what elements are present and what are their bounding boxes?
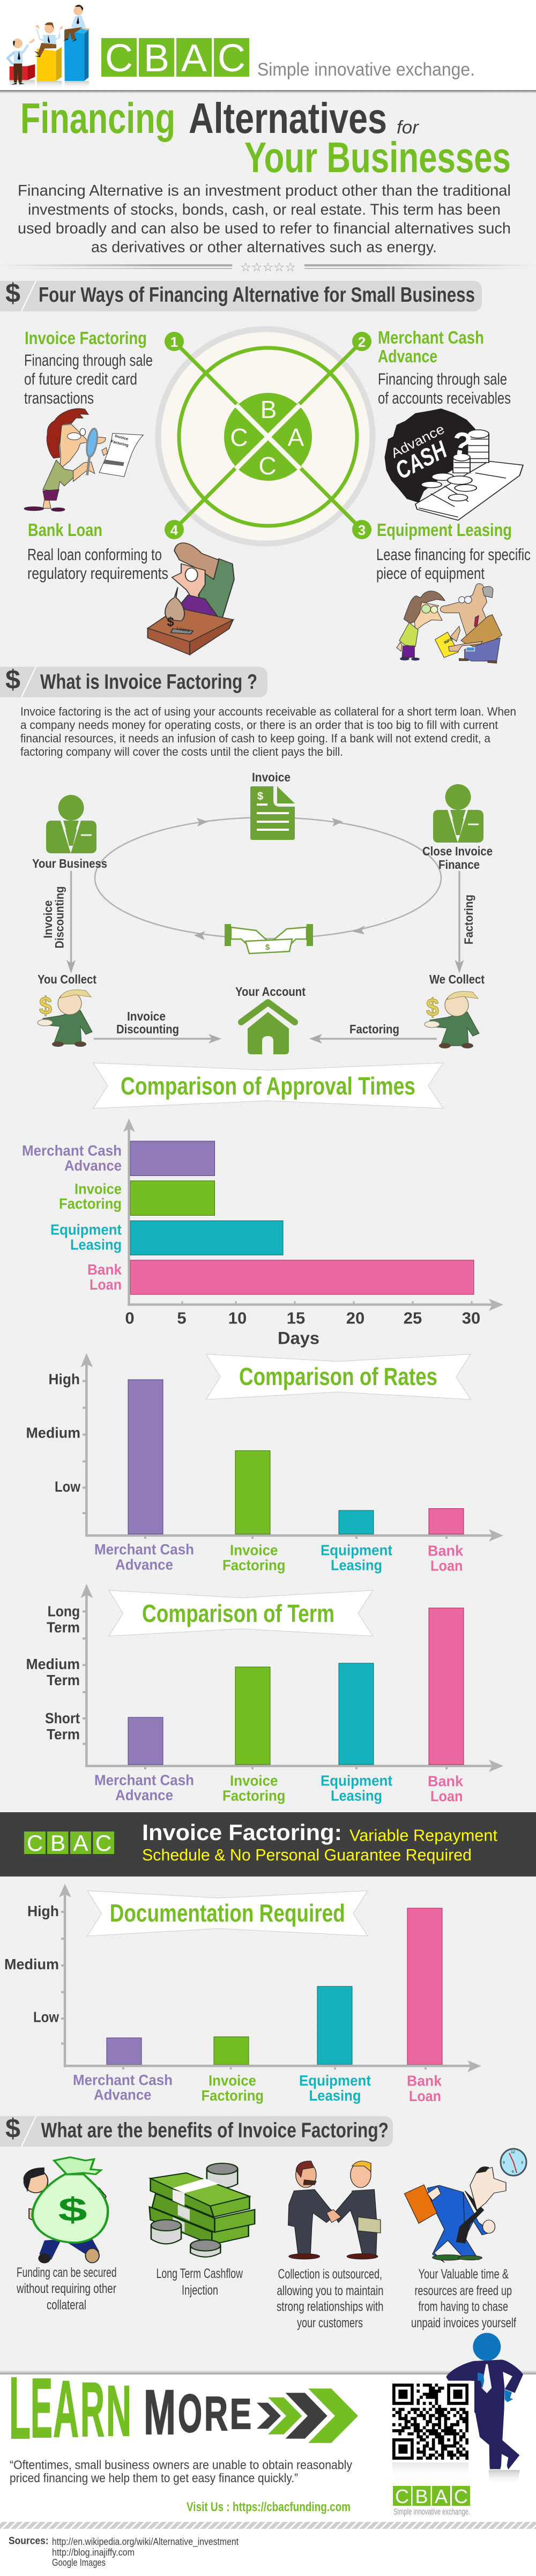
sources: Sources:: [9, 2535, 49, 2547]
label: your business: Your Business: [32, 857, 107, 870]
icon: house: [241, 1002, 295, 1054]
illustration: advance cash: Advance: [389, 421, 447, 461]
level labels: Low: [55, 1478, 80, 1495]
axes: [123, 1119, 503, 1311]
level labels: Short: [45, 1710, 80, 1726]
heading banner: approval times: [93, 1063, 443, 1108]
logo: CBAC: C: [218, 37, 245, 80]
section heading: what is invoice factoring: [0, 665, 267, 697]
icon: man holding dollar left: $: [39, 992, 52, 1019]
bar chart: term: [26, 1584, 503, 1805]
logo: CBAC small: B: [50, 1830, 65, 1856]
callout band: invoice factoring: Invoice Factoring:: [142, 1820, 342, 1845]
heading: learn more: N: [106, 2371, 131, 2451]
logo: CBAC: [101, 37, 249, 80]
diagram: CBAC wheel: 1: [170, 334, 178, 350]
label: invoice discounting horizontal: [116, 1009, 179, 1036]
sources: Google Images: [52, 2557, 106, 2568]
bars: [128, 1380, 464, 1534]
arrow: chevrons: [257, 2388, 358, 2443]
text: [277, 2267, 384, 2331]
intro paragraph: as derivatives or other alternatives such as energy.: [91, 239, 437, 256]
hatched divider: [0, 2522, 536, 2529]
label: invoice discounting horizontal: Invoice: [127, 1009, 166, 1023]
heading banner: approval times: Comparison of Approval Times: [121, 1072, 415, 1100]
heading: learn more: M: [144, 2377, 176, 2448]
text: allowing you to maintain: [277, 2283, 384, 2298]
category labels: Merchant Cash: [73, 2072, 173, 2088]
star divider: ☆☆☆☆☆: [240, 260, 296, 274]
diagram: CBAC wheel: 2: [358, 334, 366, 350]
label: invoice discounting horizontal: Discounting: [116, 1022, 179, 1036]
illustration: equipment leasing people: [397, 584, 502, 663]
tagline: Simple innovative exchange.: [257, 59, 475, 80]
illustration: advance cash: [385, 408, 523, 520]
axes: [80, 1584, 503, 1772]
invoice factoring paragraph: a company needs money for operating costs, or there is an order that is too big to fill with current: [20, 718, 498, 732]
category labels: Equipment: [50, 1221, 122, 1238]
callout band: invoice factoring: [0, 1812, 536, 1877]
day ticks: 15: [287, 1309, 305, 1327]
label: invoice discounting vertical: Discounting: [53, 887, 66, 949]
logo: CBAC footer: B: [415, 2485, 428, 2507]
title: [20, 94, 511, 181]
text: equipment leasing: [376, 520, 531, 583]
icon: close invoice finance person: [433, 784, 483, 843]
category labels: Factoring: [202, 2087, 264, 2104]
logo: CBAC: A: [181, 37, 207, 80]
category labels: Equipment: [321, 1542, 392, 1559]
logo: CBAC small: A: [73, 1830, 88, 1856]
text: your customers: [297, 2316, 363, 2331]
callout band: invoice factoring: Variable Repayment: [349, 1826, 497, 1845]
sources: http://blog.inajiffy.com: [52, 2547, 135, 2558]
heading: learn more: O: [178, 2384, 202, 2444]
text: Injection: [182, 2283, 218, 2298]
category labels: Factoring: [222, 1788, 285, 1804]
icon: clock: 3: [521, 2161, 523, 2165]
category labels: Bank: [407, 2073, 442, 2089]
callout band: invoice factoring: Schedule & No Personal Guarantee Required: [142, 1845, 472, 1864]
visit link: Visit Us : https://cbacfunding.com: [187, 2500, 351, 2514]
benefit: cashflow: [150, 2163, 255, 2298]
text: invoice factoring: transactions: [24, 389, 94, 407]
QR reflection: [392, 2462, 468, 2480]
axis title: Days: [278, 1328, 319, 1347]
heading: learn more: E: [31, 2361, 53, 2455]
illustration: advance cash: ?: [449, 425, 474, 463]
category labels: [73, 2072, 442, 2104]
category labels: Loan: [430, 1788, 463, 1805]
flow diagram: invoice factoring cycle: [32, 770, 493, 1054]
level labels: High: [48, 1371, 80, 1388]
logo: CBAC: B: [144, 37, 169, 80]
arrow: factoring down: [455, 871, 464, 973]
invoice factoring paragraph: Invoice factoring is the act of using your accounts receivable as collateral for a short term loan. When: [20, 705, 516, 718]
icon: man holding dollar right: $: [426, 993, 439, 1021]
intro paragraph: used broadly and can also be used to refer to financial alternatives such: [18, 220, 511, 237]
category labels: Merchant Cash: [94, 1541, 194, 1558]
arrow: invoice discounting down: [66, 871, 76, 973]
logo: CBAC footer: [393, 2485, 470, 2517]
text: bank loan: Real loan conforming to: [27, 545, 162, 564]
category labels: Invoice: [230, 1772, 278, 1789]
bars: [107, 1908, 442, 2065]
day ticks: 20: [346, 1309, 364, 1327]
category labels: Advance: [115, 1787, 173, 1804]
icon: man holding dollar right: [425, 992, 479, 1048]
illustration: equipment leasing people: INFO: [443, 636, 454, 645]
invoice factoring paragraph: financial resources, it needs an infusion of cash to keep going. If a bank will not extend credit, a: [20, 732, 491, 745]
bars: [128, 1608, 464, 1765]
section heading: benefits: $: [5, 2113, 20, 2143]
sources: [9, 2535, 239, 2568]
logo: CBAC: C: [105, 37, 133, 80]
category labels: Factoring: [222, 1557, 285, 1574]
heading banner: rates: Comparison of Rates: [239, 1363, 437, 1390]
day ticks: 25: [404, 1309, 422, 1327]
label: invoice discounting vertical: [41, 887, 66, 949]
section heading: four ways: $: [5, 278, 20, 308]
logo: CBAC small: [24, 1830, 114, 1856]
benefit: funding: [16, 2157, 116, 2312]
category labels: Loan: [430, 1558, 463, 1574]
section heading: benefits: What are the benefits of Invoice Factoring?: [41, 2119, 389, 2142]
label: factoring horizontal: Factoring: [349, 1022, 399, 1036]
diagram: CBAC wheel: 3: [358, 522, 366, 538]
label: your account: Your Account: [235, 985, 306, 999]
label: you collect: You Collect: [38, 972, 96, 986]
category labels: Bank: [87, 1261, 122, 1278]
title: Financing: [20, 94, 175, 142]
icon: clock: 6: [512, 2170, 514, 2174]
category labels: Equipment: [299, 2072, 371, 2089]
text: equipment leasing: Equipment Leasing: [377, 520, 512, 540]
label: close invoice finance: [422, 844, 493, 872]
icon: your business person: [46, 795, 96, 853]
figure: businessman leaning on QR: [446, 2333, 523, 2485]
category labels: Leasing: [70, 1236, 122, 1253]
icon: exchange of money: [225, 924, 313, 954]
section heading: what is invoice factoring: $: [5, 665, 20, 695]
title: for: [397, 117, 420, 138]
icon: clock: 9: [503, 2161, 505, 2165]
diagram: CBAC wheel: A: [288, 423, 304, 451]
icon: invoice document: [250, 786, 295, 840]
level labels: Medium: [26, 1656, 80, 1672]
arrow: to account from right: [309, 1034, 437, 1044]
quote: [10, 2458, 352, 2485]
text: invoice factoring: Financing through sale: [24, 351, 153, 370]
invoice factoring paragraph: factoring company will cover the costs until the client pays the bill.: [20, 745, 343, 758]
logo: CBAC footer: A: [435, 2485, 448, 2507]
arrow: to account from left: [94, 1034, 221, 1044]
category labels: Invoice: [75, 1180, 122, 1197]
day ticks: 10: [228, 1309, 247, 1327]
text: invoice factoring: [24, 328, 153, 407]
label: invoice: Invoice: [252, 770, 291, 784]
label: close invoice finance: Finance: [438, 858, 480, 872]
icon: man carrying money bag: $: [58, 2191, 87, 2228]
category labels: Loan: [90, 1276, 122, 1293]
day ticks: [125, 1309, 480, 1327]
illustration: woman with magnifier and invoice: [24, 408, 143, 511]
category labels: Merchant Cash: [94, 1772, 194, 1788]
day ticks: 0: [125, 1309, 135, 1327]
category labels: [94, 1772, 463, 1805]
text: equipment leasing: piece of equipment: [376, 564, 485, 583]
footer panel: [0, 2333, 536, 2576]
category labels: Leasing: [331, 1557, 382, 1574]
level labels: Long: [48, 1603, 80, 1620]
text: [157, 2266, 243, 2298]
sources: http://en.wikipedia.org/wiki/Alternative_investment: [52, 2536, 239, 2548]
benefit: time: [405, 2149, 526, 2331]
level labels: Term: [47, 1726, 80, 1743]
heading banner: term: [109, 1590, 373, 1636]
icon: two businessmen shaking hands: [288, 2161, 381, 2259]
category labels: Invoice: [209, 2072, 256, 2089]
axes: [59, 1884, 481, 2072]
heading banner: documentation: [87, 1891, 368, 1936]
level labels: High: [27, 1903, 59, 1919]
icon: man carrying money bag: [23, 2157, 108, 2264]
logo: CBAC footer: C: [395, 2485, 409, 2507]
text: [411, 2267, 516, 2331]
text: Funding can be secured: [17, 2265, 117, 2280]
category labels: [94, 1541, 463, 1574]
day ticks: 5: [177, 1309, 187, 1327]
star divider: [0, 260, 536, 274]
level labels: [26, 1603, 80, 1743]
text: bank loan: regulatory requirements: [27, 564, 168, 583]
icon: exchange of money: $: [265, 943, 270, 952]
text: without requiring other: [16, 2281, 116, 2296]
diagram: CBAC wheel: C: [230, 423, 248, 451]
header band: [0, 0, 536, 93]
illustration: banker woman with loan bag: $: [167, 615, 174, 629]
category labels: Loan: [409, 2088, 441, 2104]
heading banner: rates: [206, 1354, 471, 1399]
icon: stacks of money and coins: [150, 2163, 255, 2257]
category labels: Invoice: [230, 1542, 278, 1559]
level labels: Medium: [26, 1425, 80, 1441]
invoice factoring paragraph: [20, 705, 516, 758]
icon: clock: 12: [511, 2150, 515, 2154]
category labels: Leasing: [309, 2087, 361, 2104]
heading: learn more: E: [230, 2390, 251, 2438]
text: invoice factoring: of future credit card: [24, 370, 137, 388]
logo: CBAC footer: C: [454, 2485, 468, 2507]
label: we collect: We Collect: [429, 972, 485, 986]
text: merchant cash advance: Merchant Cash: [378, 327, 484, 347]
category labels: Factoring: [59, 1195, 122, 1212]
category labels: Advance: [64, 1157, 122, 1174]
text: bank loan: [27, 520, 168, 583]
illustration: banker woman with loan bag: Loans: [176, 626, 190, 634]
section heading: what is invoice factoring: What is Invoice Factoring ?: [40, 671, 257, 694]
logo: CBAC footer: Simple innovative exchange.: [393, 2506, 470, 2517]
section heading: four ways: [0, 278, 482, 311]
day ticks: 30: [462, 1309, 480, 1327]
heading banner: documentation: Documentation Required: [110, 1899, 345, 1927]
illustration: banker woman with loan bag: [148, 543, 234, 655]
text: strong relationships with: [277, 2299, 384, 2314]
heading: learn more: R: [80, 2366, 105, 2453]
icon: businessmen on rising bars: [8, 5, 90, 90]
heading banner: term: Comparison of Term: [142, 1599, 334, 1627]
logo: CBAC small: C: [95, 1830, 111, 1856]
category labels: Merchant Cash: [22, 1142, 122, 1159]
quote: priced financing we help them to get easy finance quickly.”: [10, 2471, 298, 2485]
axes: [80, 1353, 503, 1542]
heading: learn more: R: [204, 2387, 228, 2441]
diagram: CBAC wheel: C: [258, 452, 277, 480]
level labels: Term: [47, 1619, 80, 1635]
bar chart: documentation: [4, 1884, 481, 2104]
icon: clock: [501, 2149, 526, 2176]
icon: man checking watch: [405, 2166, 506, 2262]
text: merchant cash advance: Advance: [378, 346, 437, 366]
text: bank loan: Bank Loan: [28, 520, 102, 540]
diagram: CBAC wheel: B: [260, 396, 277, 423]
level labels: Term: [47, 1672, 80, 1688]
category labels: Bank: [428, 1773, 463, 1789]
text: collateral: [47, 2297, 86, 2312]
level labels: [4, 1903, 59, 2026]
diagram: CBAC wheel: [158, 329, 373, 544]
heading: learn more: A: [53, 2364, 79, 2454]
category labels: Advance: [94, 2087, 151, 2103]
label: factoring vertical: Factoring: [462, 895, 475, 944]
category labels: Bank: [428, 1543, 463, 1559]
level labels: Medium: [4, 1956, 59, 1972]
level labels: [26, 1371, 80, 1495]
illustration: woman with magnifier and invoice: Invoice: [114, 434, 129, 441]
category labels: Equipment: [321, 1772, 392, 1789]
icon: invoice document: $: [257, 791, 263, 802]
heading: learn more: L: [9, 2359, 31, 2457]
benefit: collection: [277, 2161, 384, 2331]
label: close invoice finance: Close Invoice: [422, 844, 493, 858]
QR code: [389, 2381, 474, 2480]
text: Collection is outsourced,: [278, 2267, 382, 2282]
category labels: Advance: [115, 1557, 173, 1573]
label: invoice discounting vertical: Invoice: [41, 900, 55, 939]
category labels: Leasing: [331, 1788, 382, 1804]
level labels: Low: [33, 2009, 59, 2026]
illustration: woman with magnifier and invoice: Factoring: [110, 439, 129, 448]
heading: learn more: [9, 2359, 251, 2457]
text: invoice factoring: Invoice Factoring: [25, 328, 147, 348]
icon: man holding dollar left: [38, 990, 92, 1047]
bar chart: rates: [26, 1353, 503, 1574]
text: Long Term Cashflow: [157, 2266, 243, 2281]
bars: [130, 1141, 474, 1294]
intro paragraph: Financing Alternative is an investment product other than the traditional: [18, 182, 511, 199]
bar chart: approval times: [22, 1119, 503, 1347]
logo: CBAC small: C: [27, 1830, 43, 1856]
diagram: CBAC wheel: 4: [170, 522, 178, 538]
text: [16, 2265, 116, 2312]
intro paragraph: [18, 182, 511, 256]
title: Alternatives: [189, 94, 387, 142]
quote: “Oftentimes, small business owners are unable to obtain reasonably: [10, 2458, 352, 2472]
illustration: advance cash: CASH: [391, 435, 451, 485]
intro paragraph: investments of stocks, bonds, cash, or real estate. This term has been: [28, 202, 501, 219]
section heading: benefits: [0, 2113, 393, 2147]
text: merchant cash advance: [378, 327, 511, 407]
category labels: [22, 1142, 122, 1293]
